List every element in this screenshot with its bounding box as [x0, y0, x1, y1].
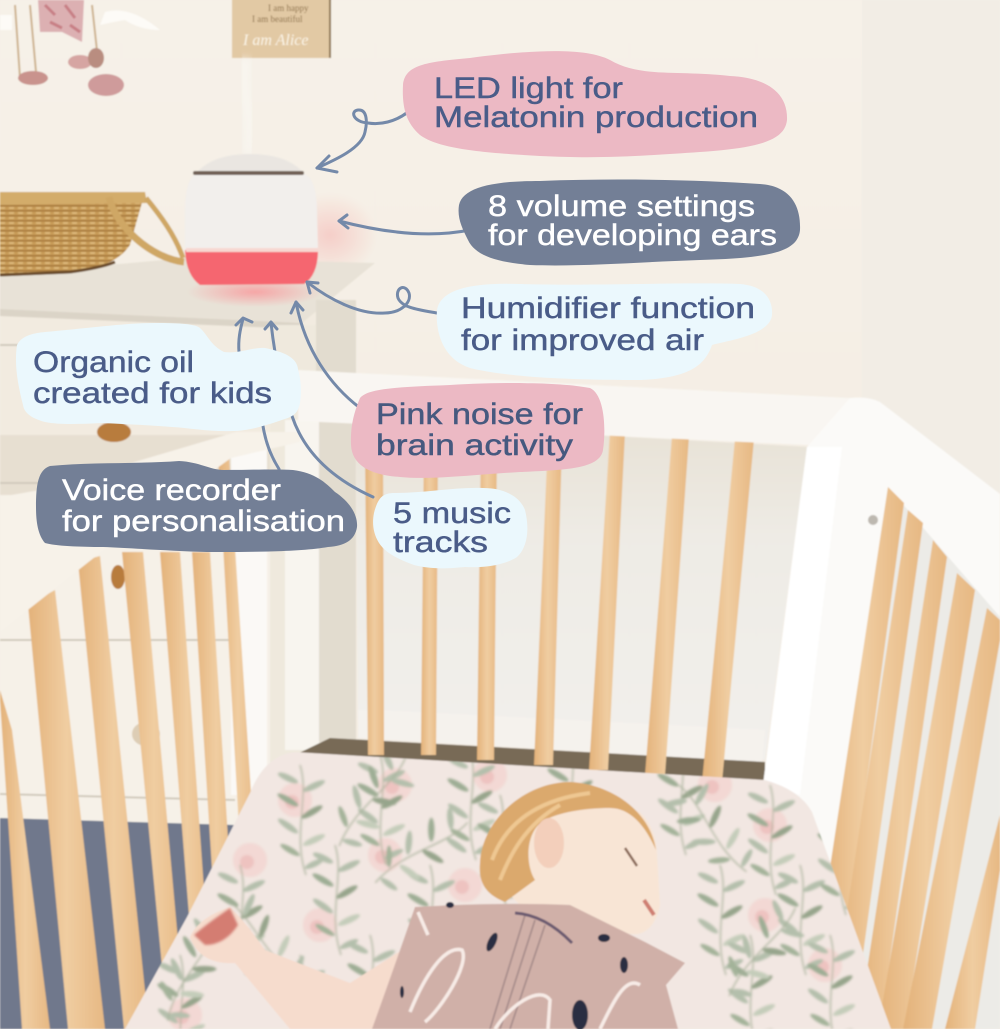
arrow: LED light [317, 110, 408, 172]
callout: humidifier [437, 283, 772, 380]
callout: pink noise: brain activity [376, 429, 573, 462]
callout: music tracks: tracks [393, 526, 488, 559]
sleeping bag dots [400, 902, 628, 1029]
shelf glow [187, 277, 323, 307]
callout: voice recorder: Voice recorder [62, 474, 281, 507]
callout: organic oil: Organic oil [33, 346, 194, 379]
callout: pink noise [351, 383, 604, 478]
ear [534, 818, 564, 868]
mouth [644, 900, 654, 915]
wall plaque [232, 0, 331, 58]
basket [0, 192, 184, 276]
callout: pink noise: Pink noise for [376, 398, 583, 431]
dresser [0, 258, 375, 830]
interior wall behind crib [322, 420, 807, 760]
callout: LED light: Melatonin production [434, 101, 758, 134]
right wall [862, 0, 1000, 520]
dresser knobs [97, 422, 160, 746]
crib end slats [822, 487, 1000, 1029]
arrow: humidifier [307, 282, 437, 313]
arrow: volume settings [339, 215, 470, 234]
sleeping bag [372, 904, 685, 1029]
front post [231, 440, 267, 795]
arrow: music tracks lower [292, 416, 373, 497]
skirting board [358, 710, 765, 762]
humidifier steam [244, 58, 250, 155]
front crib rail [0, 432, 300, 632]
wall plaque: I am beautiful [252, 14, 303, 24]
callout: voice recorder: for personalisation [62, 505, 345, 538]
carpet [0, 818, 235, 1029]
wall plaque: I am happy [268, 3, 309, 13]
callout: volume settings: for developing ears [488, 219, 777, 252]
hair [480, 782, 656, 902]
closed eye [625, 848, 637, 866]
callout: music tracks: 5 music [393, 497, 511, 530]
wall plaque: I am Alice [242, 32, 308, 49]
callout: humidifier: for improved air [461, 324, 704, 357]
sleeping toddler [190, 782, 685, 1029]
arrow: voice recorder [263, 426, 279, 469]
floral sheet pattern [142, 740, 866, 1029]
back crib rail [298, 370, 850, 447]
mattress [125, 752, 891, 1029]
sleeping bag scribbles [410, 912, 640, 1029]
wall glow [282, 193, 378, 277]
arrow: organic oil [236, 318, 252, 352]
screw [868, 515, 878, 525]
crib end panel [763, 398, 1000, 1029]
callout: music tracks [373, 488, 527, 568]
arrow: music tracks upper [265, 322, 277, 352]
hanging mobile [0, 0, 160, 96]
arm and hand [190, 907, 420, 1029]
callout: organic oil [16, 323, 301, 431]
sleeping bag zip [490, 915, 545, 1029]
callout: volume settings: 8 volume settings [488, 190, 755, 223]
callout: LED light: LED light for [434, 72, 623, 105]
callout: LED light [403, 51, 787, 157]
callout: voice recorder [36, 461, 357, 552]
callout: organic oil: created for kids [33, 377, 272, 410]
floor [295, 738, 765, 785]
front slats [0, 455, 258, 1029]
back slats [365, 432, 754, 782]
end panel slats backing [830, 487, 1000, 1029]
humidifier device [185, 154, 318, 285]
callout: volume settings [459, 180, 800, 265]
arrow: pink noise [291, 302, 360, 408]
face [505, 808, 660, 934]
callout: humidifier: Humidifier function [461, 292, 755, 325]
